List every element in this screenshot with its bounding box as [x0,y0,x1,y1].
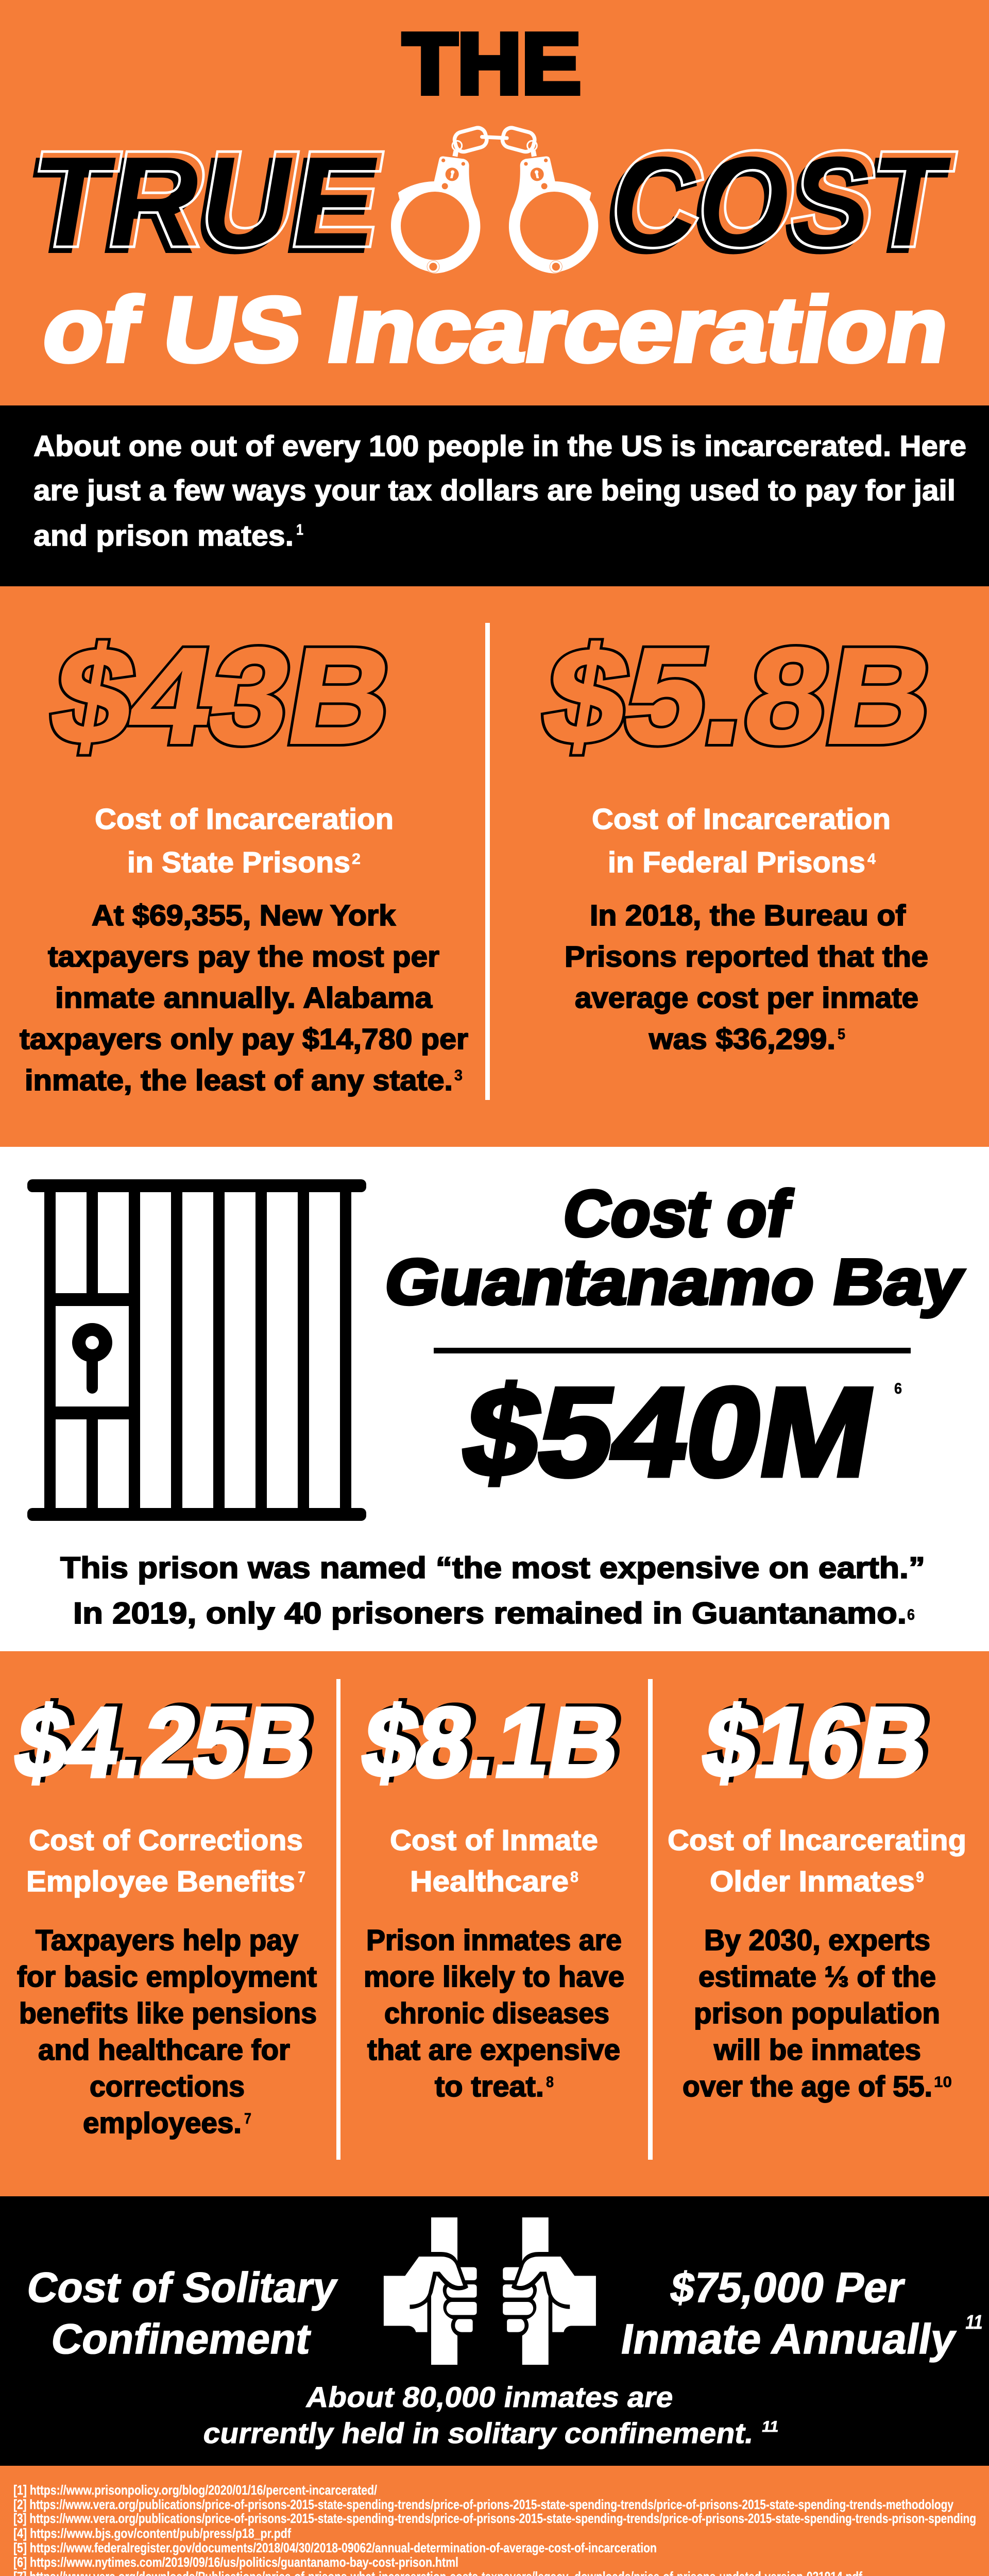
heading: Cost of Solitary Confinement [24,2264,340,2363]
text block: state prisons heading: in State Prisons [127,846,350,879]
text block: solitary description: currently held in solitary confinement. [201,2417,756,2449]
stat: $43B: $43B [42,619,404,772]
text block: heading: 8 [570,1869,578,1886]
text block: body: 8 [546,2074,554,2091]
text block: body: to treat. [435,2070,544,2103]
text block: body: Taxpayers help pay [36,1924,298,1957]
text block: body: will be inmates [713,2033,921,2066]
text block: federal prisons heading: in Federal Prisons [608,846,865,879]
text block: federal prisons body: Prisons reported that the [565,940,928,973]
panel: Guantanamo Bay [0,1147,989,1651]
text block: heading: Older Inmates [710,1865,915,1898]
text block: state prisons body: inmate annually. Alabama [55,981,433,1014]
text block: body: 7 [244,2110,251,2127]
text block: heading: Employee Benefits [26,1865,295,1898]
text block: intro: are just a few ways your tax dollars are being used to pay for jail [33,474,956,507]
divider [648,1679,653,2160]
text block: body [364,1924,624,2103]
title: of US Incarceration: of US Incarceration [36,278,957,381]
text block: federal prisons heading: Cost of Incarceration [592,803,891,836]
text block: state prisons heading: Cost of Incarceration [95,803,394,836]
title: TRUE black fill: TRUE [17,132,386,279]
text block: intro [33,430,966,552]
heading: Cost of Solitary Confinement: Confinement [48,2316,314,2363]
title: TRUE white outline: TRUE [23,126,393,273]
text block: federal prisons body [565,899,928,1056]
text block: solitary description [201,2381,780,2449]
text block: body: for basic employment [17,1960,317,1993]
text block: federal prisons heading: 4 [867,851,876,868]
text block: body: prison population [694,1997,940,2030]
stat: $75,000 Per Inmate Annually [618,2264,985,2363]
text block: body: chronic diseases [384,1997,609,2030]
panel: sources [13,2482,976,2576]
text block: state prisons body: inmate, the least of any state. [25,1064,453,1097]
divider [336,1679,340,2160]
text block: Guantanamo description: 6 [907,1606,915,1623]
column: older inmates [668,1684,966,2103]
text block: body: that are expensive [367,2033,620,2066]
heading: Cost of Guantanamo Bay [380,1177,969,1318]
text block: heading [390,1824,598,1898]
heading: Cost of Guantanamo Bay: Cost of [558,1177,796,1250]
panel: sources: [6] https://www.nytimes.com/2019/09/16/us/politics/guantanamo-bay-cost-prison.html [13,2554,458,2570]
stat: $5.8B: $5.8B [534,619,945,772]
text block: federal prisons body: In 2018, the Bureau of [590,899,906,932]
panel: title header [33,31,959,364]
text block: body: corrections [90,2070,245,2103]
stat: $5.8B: $5.8B [534,619,945,772]
text block: heading [668,1824,966,1898]
panel: sources: [4] https://www.bjs.gov/content/pub/press/p18_pr.pdf [13,2526,291,2541]
stat: $8.1B: $8.1B [355,1687,628,1798]
divider [485,623,490,1100]
text block: heading [26,1824,305,1898]
stat: $16B: $16B [695,1687,937,1798]
text block: body: and healthcare for [38,2033,290,2066]
text block: heading: 9 [916,1869,924,1886]
title: COST white outline: COST [602,126,960,273]
text block: intro: and prison mates. [33,519,294,552]
icon: hands gripping bars [384,2217,596,2365]
title: COST black fill: COST [596,132,954,279]
column: inmate healthcare [355,1684,634,2103]
panel: sources: [5] https://www.federalregister.gov/documents/2018/04/30/2018-09062/annual-determination-of-average-cost-of-incarceration [13,2540,657,2555]
stat: $4.25B: $4.25B [8,1687,321,1798]
text block: heading: Healthcare [410,1865,569,1898]
stat: $75,000 Per Inmate Annually: 11 [964,2311,985,2333]
stat: $8.1B: $8.1B [360,1684,634,1794]
text block: federal prisons body: was $36,299. [649,1023,835,1056]
text block: Guantanamo description: In 2019, only 40 prisoners remained in Guantanamo. [73,1597,907,1630]
title: THE: THE [403,16,581,112]
text block: body [683,1924,952,2103]
text block: federal prisons body: average cost per inmate [575,981,918,1014]
text block: state prisons body: taxpayers only pay $14,780 per [20,1023,468,1056]
text block: state prisons body [20,899,468,1097]
icon: jail cell bars [27,1179,366,1521]
text block: intro: 1 [296,521,303,538]
stat: $43B: $43B [42,619,404,772]
text block: state prisons body: At $69,355, New York [92,899,396,932]
text block: state prisons body: 3 [454,1067,463,1084]
panel: three cost columns [8,1679,966,2160]
stat: $4.25B: $4.25B [13,1684,326,1794]
text block: body: 10 [934,2074,952,2091]
text block: body: Prison inmates are [366,1924,622,1957]
text block: solitary description: 11 [761,2418,780,2435]
icon: handcuffs [391,126,598,274]
stat: $540M: $540M [454,1362,884,1503]
text block: body: estimate ⅓ of the [698,1960,936,1993]
text block: heading: Cost of Incarcerating [668,1824,966,1857]
text block: body [17,1924,317,2140]
text block: body: benefits like pensions [19,1997,317,2030]
stat: $540M: 6 [894,1380,902,1397]
heading: Cost of Solitary Confinement: Cost of Solitary [24,2264,340,2311]
text block: heading: Cost of Inmate [390,1824,598,1857]
panel: state and federal costs [20,619,945,1100]
text block: state prisons heading: 2 [352,851,361,868]
text block: Guantanamo description [60,1551,925,1630]
text block: solitary description: About 80,000 inmates are [304,2381,676,2413]
text block: body: employees. [83,2107,242,2140]
text block: federal prisons heading [592,803,891,879]
text block: body: over the age of 55. [683,2070,932,2103]
stat: $75,000 Per Inmate Annually: $75,000 Per [667,2264,908,2311]
text block: state prisons body: taxpayers pay the most per [48,940,439,973]
stat: $75,000 Per Inmate Annually: Inmate Annually [618,2316,959,2363]
text block: heading: 7 [298,1869,305,1886]
stat: $16B: $16B [701,1684,942,1794]
panel: solitary confinement [0,2196,989,2466]
text block: Guantanamo description: This prison was named “the most expensive on earth.” [60,1551,925,1585]
column: corrections employee benefits [8,1684,326,2140]
text block: heading: Cost of Corrections [29,1824,303,1857]
divider [434,1348,911,1353]
text block: body: By 2030, experts [704,1924,930,1957]
panel: sources: [1] https://www.prisonpolicy.org/blog/2020/01/16/percent-incarcerated/ [13,2482,377,2498]
heading: Cost of Guantanamo Bay: Guantanamo Bay [380,1246,969,1318]
text block: state prisons heading [95,803,394,879]
text block: body: more likely to have [364,1960,624,1993]
text block: federal prisons body: 5 [838,1026,845,1043]
text block: intro: About one out of every 100 people in the US is incarcerated. Here [33,430,966,463]
panel: intro band [0,405,989,586]
